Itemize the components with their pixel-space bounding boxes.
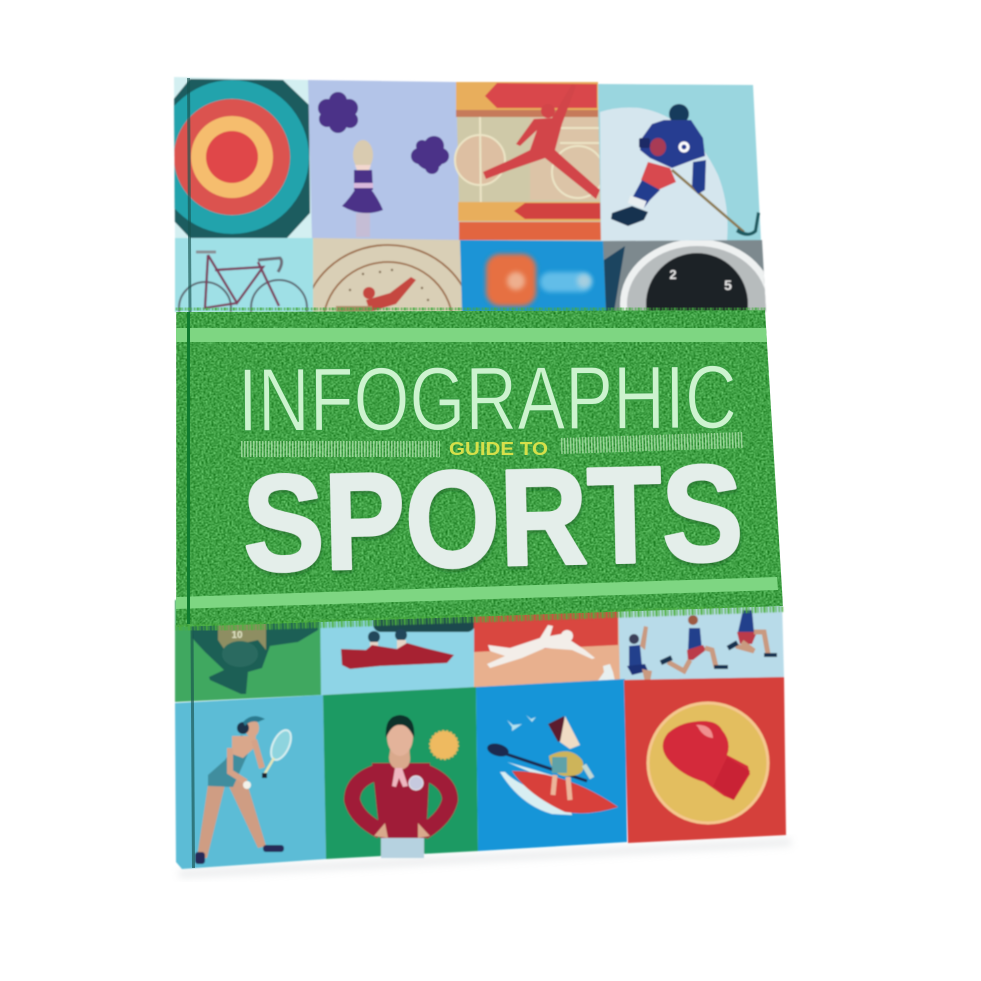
icon: white figure bbox=[597, 664, 615, 682]
panel: swimming pool dial bbox=[312, 238, 464, 312]
icon: left pom-pom bbox=[318, 92, 358, 133]
panel: kayaker bbox=[476, 679, 627, 851]
icon: cheerleader figure bbox=[342, 140, 383, 237]
icon: athlete one bbox=[627, 626, 652, 682]
icon: swimmer bbox=[336, 269, 429, 312]
icon: white swimmer bbox=[487, 625, 595, 668]
dotted strip right bbox=[561, 440, 743, 446]
panel: rowing boat bbox=[320, 600, 475, 695]
title: SPORTS: SPORTS bbox=[241, 437, 745, 601]
panel: lunging athletes bbox=[618, 600, 784, 682]
panel: ice hockey bbox=[598, 84, 761, 241]
icon: athlete three bbox=[727, 610, 777, 657]
panel: coach bbox=[323, 687, 478, 859]
bottom field line bbox=[176, 577, 778, 609]
icon: horse and jockey bbox=[192, 610, 320, 694]
panel: cover artwork top rows bbox=[172, 76, 767, 313]
panel: grass band bbox=[176, 308, 783, 629]
panel: cheerleader bbox=[308, 80, 461, 241]
panel: boxing glove bbox=[624, 677, 786, 843]
number: 5: 5 bbox=[724, 277, 732, 293]
panel: blue ball speed bbox=[460, 240, 606, 312]
icon: racing bicycle bbox=[177, 250, 309, 312]
book shadow bbox=[178, 838, 792, 878]
spine edge bbox=[187, 78, 195, 868]
icon: boxing glove bbox=[663, 721, 750, 800]
number: 2: 2 bbox=[669, 267, 677, 282]
icon: athlete two bbox=[660, 615, 728, 671]
subtitle: GUIDE TO: GUIDE TO bbox=[449, 439, 548, 459]
top field line bbox=[176, 328, 767, 342]
icon: kayaker on red kayak bbox=[486, 716, 618, 815]
icon: jumping basketball player bbox=[483, 84, 600, 199]
title: INFOGRAPHIC: INFOGRAPHIC bbox=[238, 348, 737, 451]
panel: archery target bbox=[172, 76, 312, 239]
icon: tennis player bbox=[195, 716, 295, 864]
icon: red boat with rowers bbox=[341, 629, 454, 669]
icon: right pom-pom bbox=[411, 136, 449, 174]
panel: cover artwork bottom rows bbox=[175, 600, 786, 869]
subtitle: GUIDE TO bbox=[241, 439, 743, 459]
icon: sun badge bbox=[430, 731, 458, 759]
icon: coach figure bbox=[352, 715, 450, 858]
panel: tennis player bbox=[175, 695, 326, 869]
panel: cycling bbox=[174, 236, 314, 313]
icon: seagulls bbox=[507, 715, 536, 731]
panel: horse racing bbox=[175, 600, 321, 702]
panel: stopwatch gauge bbox=[602, 239, 767, 312]
dotted strip left bbox=[241, 441, 440, 457]
icon: hockey player bbox=[611, 104, 760, 236]
panel: basketball bbox=[455, 82, 604, 241]
panel: swimmer from above bbox=[474, 600, 620, 688]
number: jockey 10: 10 bbox=[231, 630, 243, 641]
